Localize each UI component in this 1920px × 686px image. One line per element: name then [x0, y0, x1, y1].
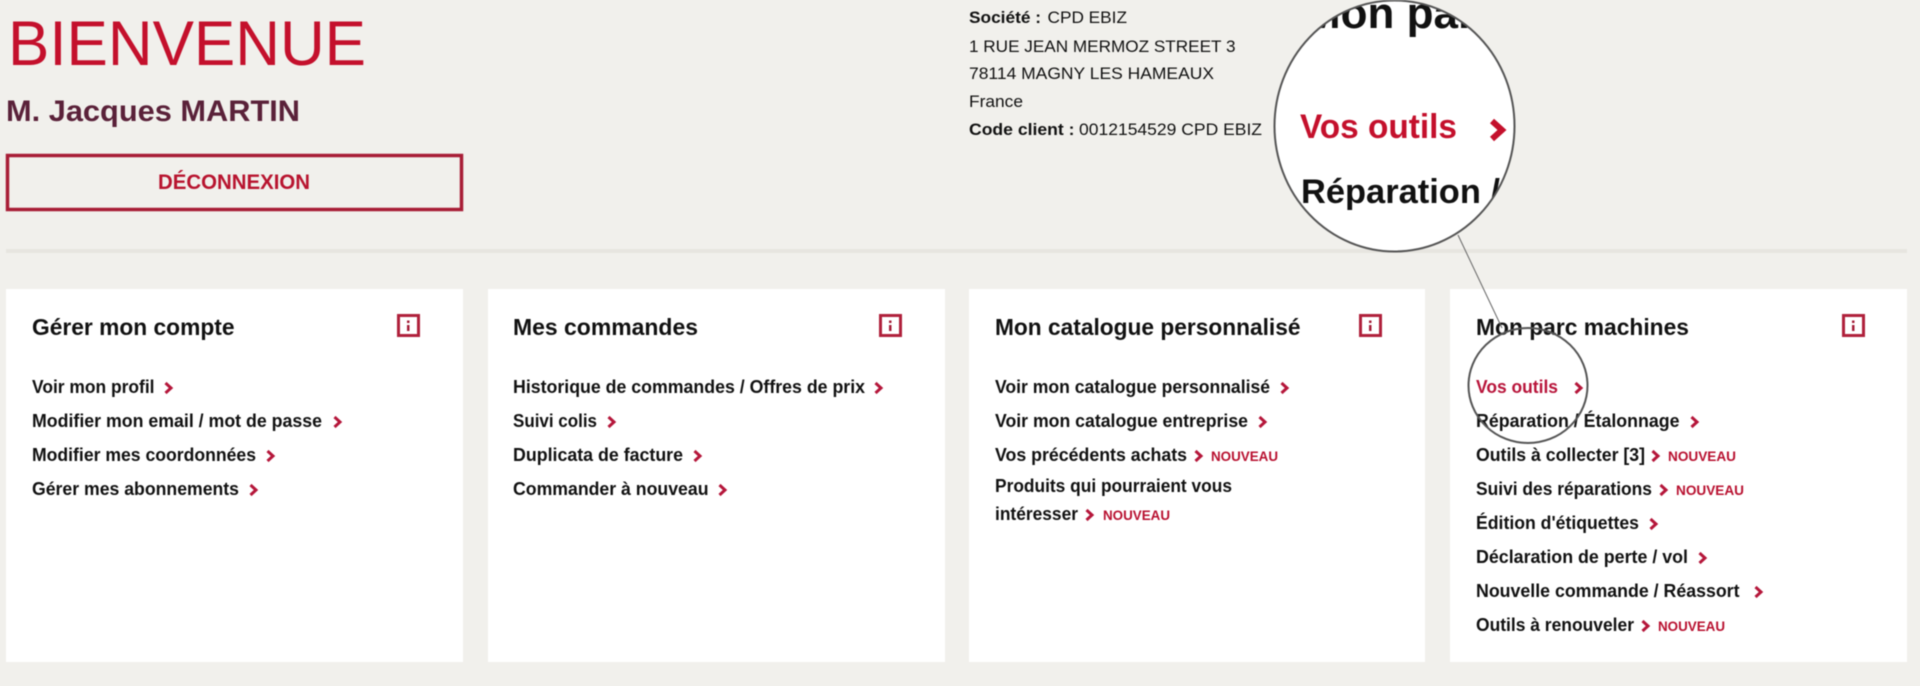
link list: Vos précédents achats — [995, 445, 1187, 465]
callout: small highlight circle — [1468, 328, 1588, 443]
company address block: 0012154529 CPD EBIZ — [1079, 120, 1262, 139]
link list: Vos outils — [1476, 377, 1558, 397]
logout button — [8, 156, 462, 210]
link list: NOUVEAU — [1668, 448, 1736, 464]
heading: Mon parc machines: Mon parc machines — [1476, 314, 1689, 340]
company address block: Société : — [969, 8, 1041, 27]
link list: Outils à renouveler — [1476, 615, 1634, 635]
company address block: CPD EBIZ — [1048, 8, 1127, 27]
link list — [995, 377, 1287, 524]
panel: Mes commandes — [488, 289, 945, 662]
link list: Réparation / Étalonnage — [1476, 410, 1680, 431]
logout button: DÉCONNEXION — [158, 171, 310, 194]
link list: NOUVEAU — [1676, 482, 1744, 498]
link list: Duplicata de facture — [513, 445, 683, 465]
link list: NOUVEAU — [1103, 507, 1170, 523]
link list: Commander à nouveau — [513, 479, 708, 499]
company address block: Code client : — [969, 120, 1074, 139]
link list: Voir mon catalogue entreprise — [995, 411, 1248, 431]
link list: Suivi colis — [513, 411, 597, 431]
callout: magnifier lens: Vos outils — [1300, 108, 1457, 146]
heading: Gérer mon compte: Gérer mon compte — [32, 314, 234, 340]
link list: Produits qui pourraient vous — [995, 476, 1232, 496]
icon: info — [398, 316, 418, 336]
link list: Suivi des réparations — [1476, 479, 1652, 499]
user name: M. Jacques MARTIN — [6, 95, 300, 128]
callout: connector line — [1458, 235, 1502, 328]
panel: Mon catalogue personnalisé — [969, 289, 1425, 662]
link list — [513, 377, 881, 499]
link list: NOUVEAU — [1658, 618, 1725, 634]
link list: Modifier mes coordonnées — [32, 445, 256, 465]
panel: Gérer mon compte — [6, 289, 463, 662]
heading: Mon catalogue personnalisé: Mon catalogue personnalisé — [995, 314, 1300, 340]
link list: Historique de commandes / Offres de prix — [513, 377, 865, 397]
link list: NOUVEAU — [1211, 448, 1278, 464]
link list — [32, 377, 340, 499]
company address block — [969, 8, 1262, 139]
icon: info — [880, 316, 900, 336]
company address block: 78114 MAGNY LES HAMEAUX — [969, 64, 1214, 83]
link list: Édition d'étiquettes — [1476, 512, 1639, 533]
title: BIENVENUE — [8, 9, 366, 79]
icon: info — [1844, 316, 1864, 336]
link list: Nouvelle commande / Réassort — [1476, 581, 1740, 601]
panel: Mon parc machines — [1450, 289, 1907, 662]
callout: magnifier lens — [1274, 0, 1514, 252]
link list — [1476, 377, 1761, 635]
link list: Voir mon catalogue personnalisé — [995, 377, 1270, 397]
icon: info — [1360, 316, 1380, 336]
link list: Voir mon profil — [32, 377, 154, 397]
callout: magnifier lens: Réparation / — [1301, 173, 1501, 211]
link list: Modifier mon email / mot de passe — [32, 411, 322, 431]
link list: Outils à collecter [3] — [1476, 445, 1645, 465]
link list: Gérer mes abonnements — [32, 479, 239, 499]
link list: Déclaration de perte / vol — [1476, 547, 1688, 567]
link list: intéresser — [995, 504, 1078, 524]
heading: Mes commandes: Mes commandes — [513, 314, 698, 340]
company address block: France — [969, 92, 1023, 111]
company address block: 1 RUE JEAN MERMOZ STREET 3 — [969, 37, 1236, 56]
